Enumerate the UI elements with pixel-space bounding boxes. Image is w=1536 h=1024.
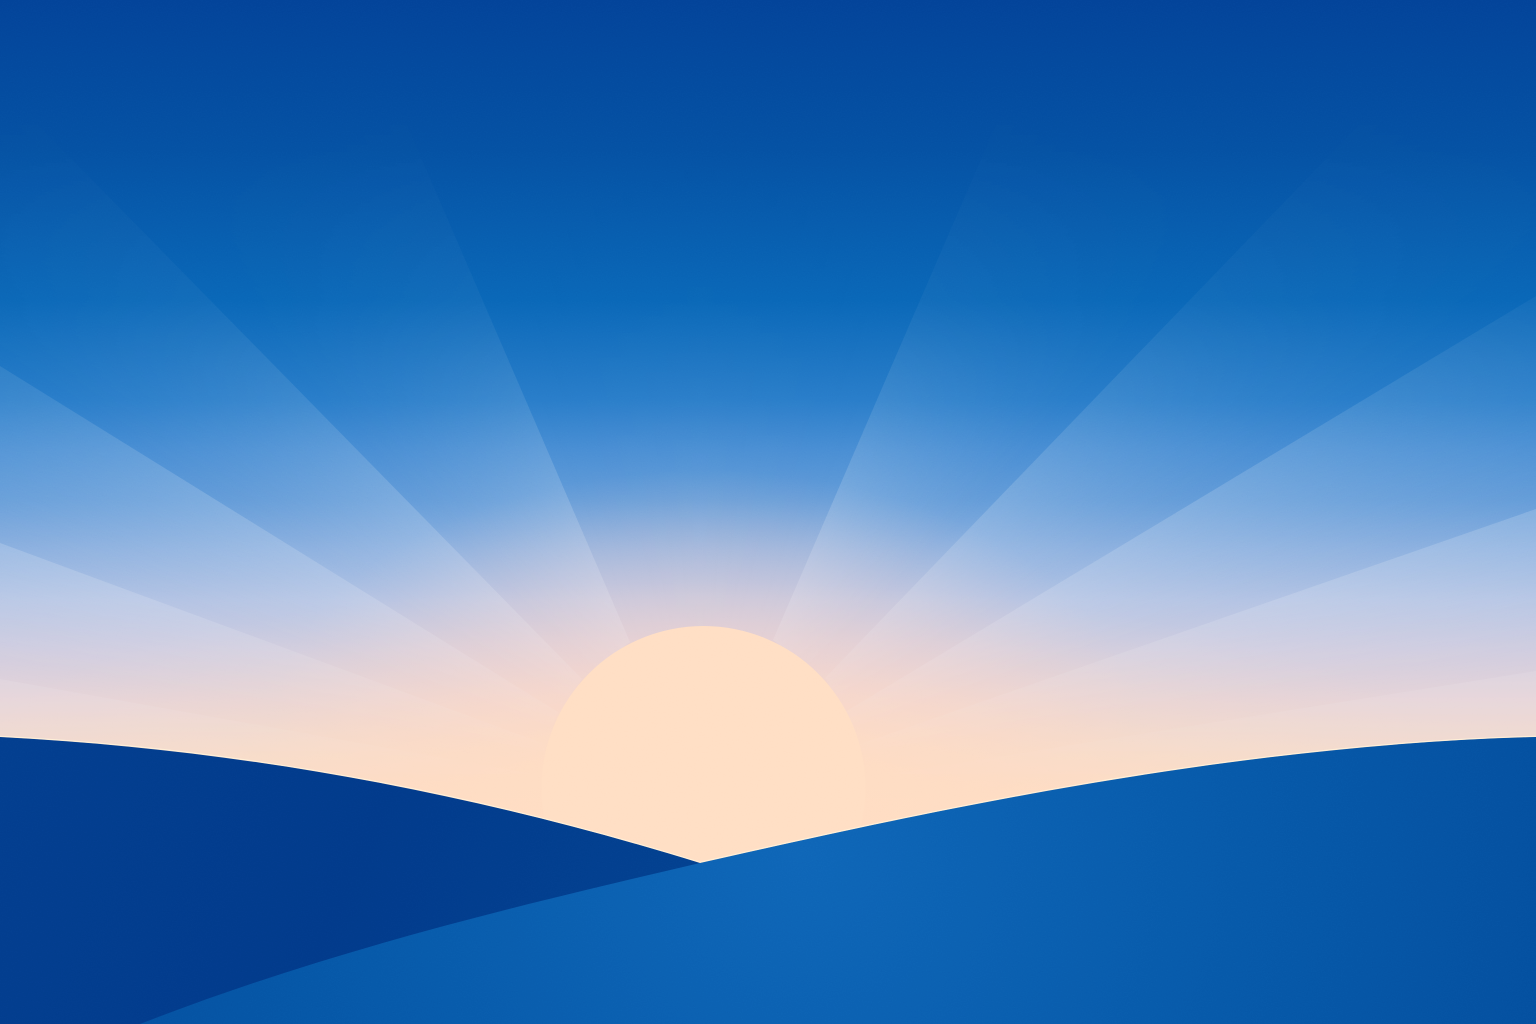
ray: right 4 bbox=[1220, 509, 1536, 620]
back hill, left bbox=[0, 736, 700, 1024]
ray: left 3 bbox=[0, 366, 394, 610]
ray: right 1 bbox=[796, 291, 997, 588]
sun rays fan bbox=[0, 291, 1536, 620]
ray: left 4 bbox=[0, 543, 206, 620]
ray: right 2 bbox=[909, 291, 1256, 592]
front hill, right bbox=[140, 736, 1536, 1024]
ray: right 3 bbox=[1015, 296, 1536, 610]
ray: left 2 bbox=[148, 291, 500, 596]
sun disc bbox=[542, 626, 866, 950]
ray: left 1 bbox=[408, 291, 606, 588]
